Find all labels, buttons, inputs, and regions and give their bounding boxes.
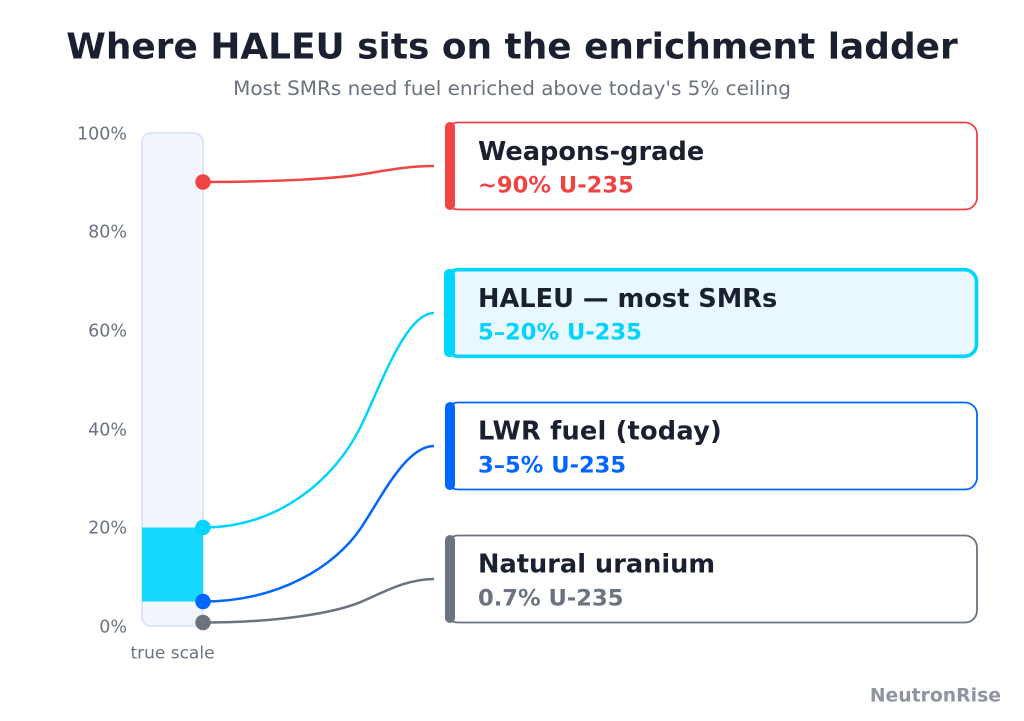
card: LWR fuel — [445, 402, 977, 490]
card: weapons-grade — [445, 122, 977, 210]
connector: natural uranium — [195, 579, 434, 630]
axis labels: 40% — [88, 420, 127, 440]
card: HALEU — [444, 269, 976, 357]
card: natural uranium — [445, 535, 977, 623]
axis labels: 0% — [99, 618, 127, 638]
card: LWR fuel: 3–5% U-235 — [478, 452, 626, 478]
card: weapons-grade: ~90% U-235 — [478, 172, 634, 198]
enrichment scale bar — [142, 133, 203, 626]
axis labels: 60% — [88, 321, 127, 341]
title: Where HALEU sits on the enrichment ladder — [66, 26, 958, 68]
scale caption: true scale — [130, 644, 215, 664]
axis labels: 20% — [88, 519, 127, 539]
axis labels: 100% — [77, 124, 127, 144]
connector: HALEU — [195, 313, 434, 535]
card: weapons-grade: Weapons-grade — [478, 137, 704, 167]
axis labels — [77, 124, 127, 638]
brand wordmark: NeutronRise — [870, 686, 1001, 706]
card: LWR fuel: LWR fuel (today) — [478, 416, 722, 446]
axis labels: 80% — [88, 223, 127, 243]
subtitle: Most SMRs need fuel enriched above today's 5% ceiling — [233, 76, 791, 100]
connector: weapons-grade — [195, 166, 434, 190]
card: HALEU: 5–20% U-235 — [478, 320, 642, 346]
card: natural uranium: 0.7% U-235 — [478, 586, 623, 612]
card: natural uranium: Natural uranium — [478, 550, 715, 580]
HALEU band — [142, 528, 203, 602]
connector: LWR fuel — [195, 446, 434, 609]
card: HALEU: HALEU — most SMRs — [478, 284, 777, 314]
